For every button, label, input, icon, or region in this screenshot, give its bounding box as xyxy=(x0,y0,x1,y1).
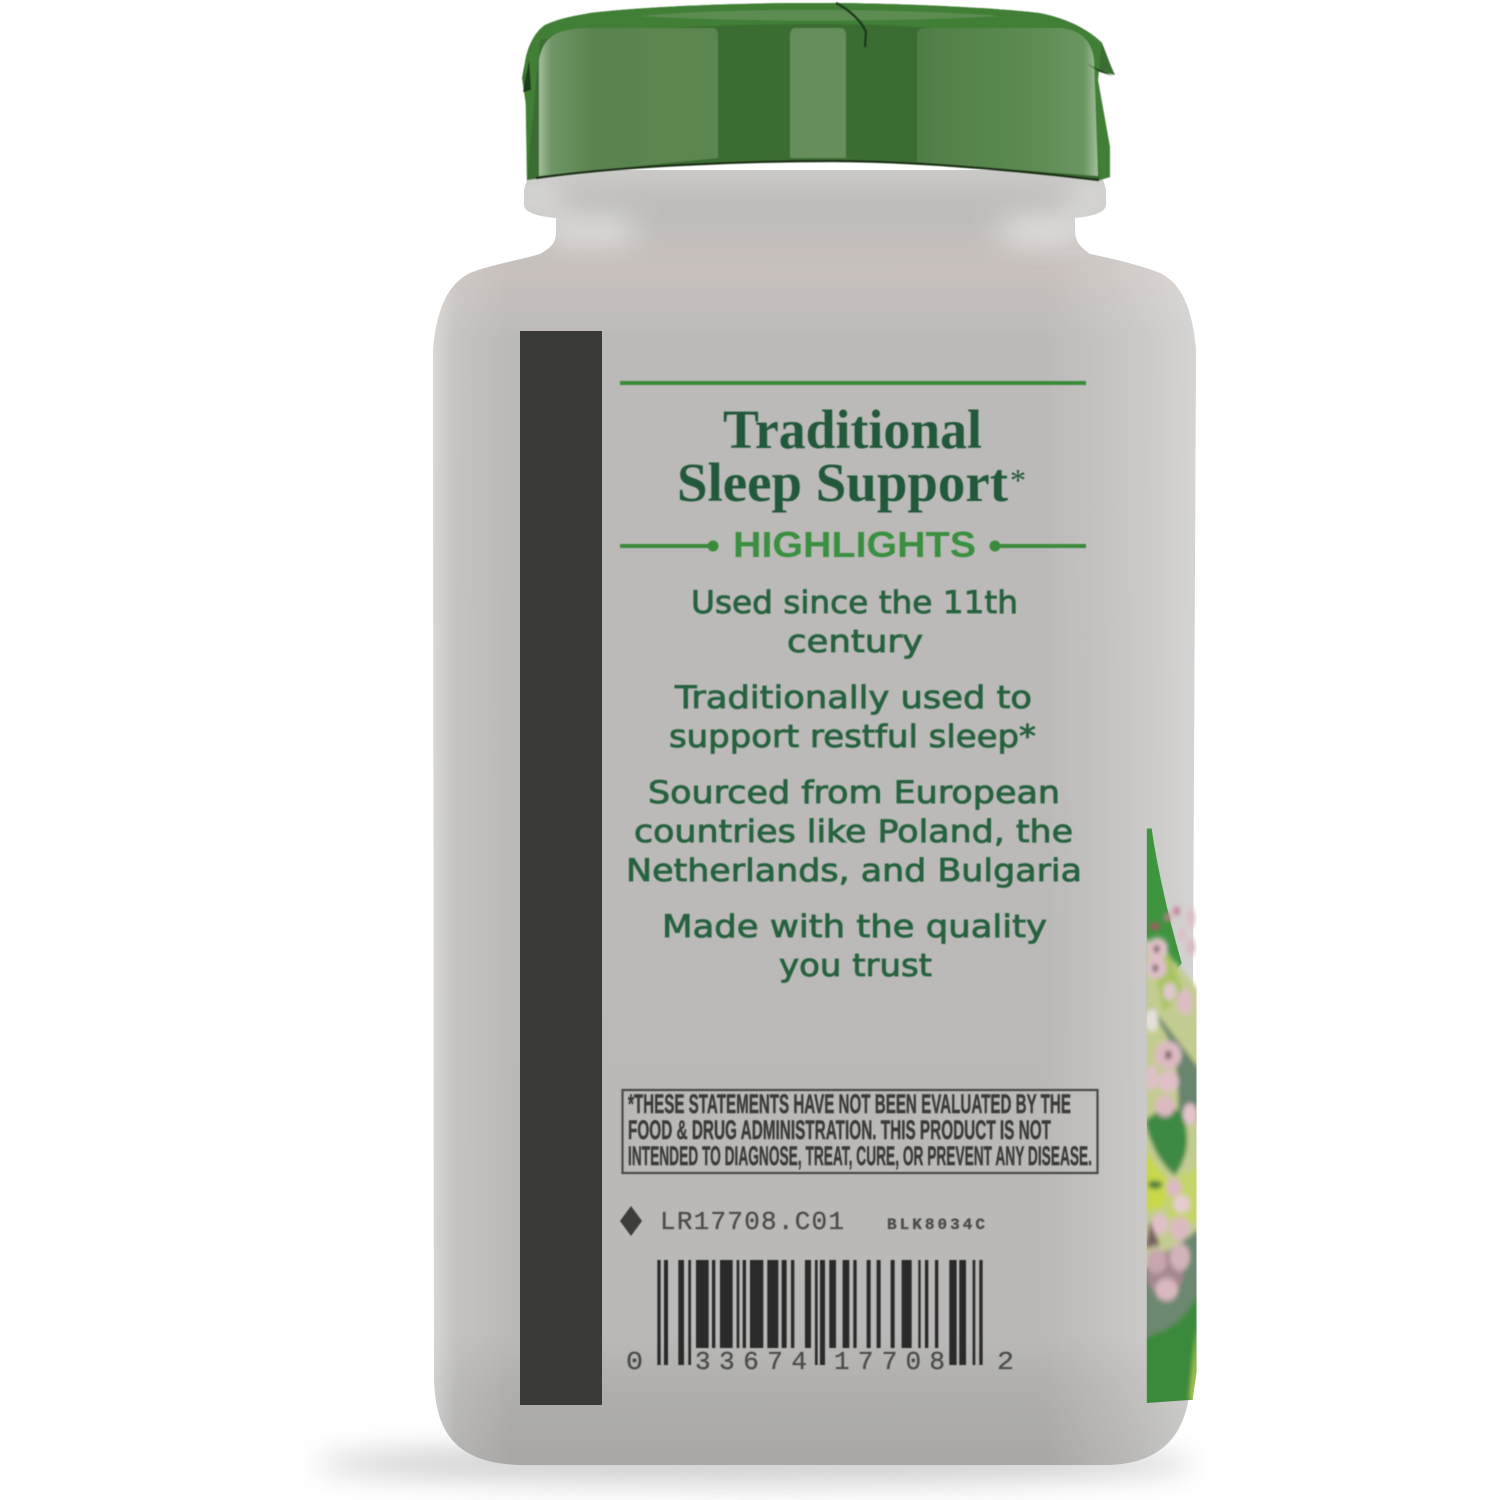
upper sparse blossoms xyxy=(1173,907,1180,915)
dark vertical side stripe xyxy=(520,331,602,1405)
top green rule xyxy=(620,381,1086,385)
heading: Traditional Sleep Support: Traditional xyxy=(723,399,982,460)
highlight: sourcing xyxy=(626,775,1082,889)
highlight: sourcing: countries like Poland, the xyxy=(634,814,1073,850)
highlights divider xyxy=(620,524,1086,565)
flower centres xyxy=(1154,946,1160,952)
highlight: quality: you trust xyxy=(779,948,932,984)
highlight: sourcing: Sourced from European xyxy=(648,775,1060,811)
highlight: used since: century xyxy=(787,624,923,660)
highlight: sourcing: Netherlands, and Bulgaria xyxy=(626,853,1082,889)
label code: LR17708.C01 xyxy=(660,1207,844,1237)
heading: Traditional Sleep Support: Sleep Support xyxy=(677,452,1009,513)
bottom green leaf xyxy=(1146,1294,1196,1403)
barcode digits: 33674 xyxy=(695,1347,807,1377)
heading: Traditional Sleep Support: * xyxy=(1010,462,1026,498)
green leaf wedge xyxy=(1147,829,1182,1012)
FDA disclaimer box: *THESE STATEMENTS HAVE NOT BEEN EVALUATED BY THE xyxy=(628,1089,1071,1119)
highlight: restful sleep: Traditionally used to xyxy=(674,680,1032,716)
green flip-top cap xyxy=(522,3,1115,180)
bottle floor shadow xyxy=(315,1444,1195,1484)
barcode digits xyxy=(626,1347,1014,1377)
heading: Traditional Sleep Support xyxy=(677,399,1026,513)
cap bottom edge xyxy=(536,161,1099,180)
lower grey foliage xyxy=(1143,1228,1200,1339)
cap top highlight xyxy=(640,10,1000,20)
pale foliage mass xyxy=(1146,936,1197,1269)
mauve flower cluster xyxy=(1147,1251,1183,1296)
bottle body with collar and neck xyxy=(420,165,1210,1475)
barcode digits: 17708 xyxy=(834,1347,945,1377)
barcode xyxy=(657,1260,983,1365)
highlight: used since xyxy=(691,585,1018,660)
cap hinge notches xyxy=(523,60,531,92)
plant illustration strip xyxy=(1146,828,1197,1403)
highlight: restful sleep: support restful sleep* xyxy=(669,719,1036,755)
pink flowers xyxy=(1147,937,1168,960)
colour code: BLK8034C xyxy=(887,1216,985,1234)
label text content xyxy=(620,381,1098,1377)
FDA disclaimer box: FOOD & DRUG ADMINISTRATION. THIS PRODUCT IS NOT xyxy=(628,1115,1051,1145)
icon: diamond marker xyxy=(620,1206,642,1236)
barcode digits: 0 xyxy=(626,1347,643,1377)
highlight: used since: Used since the 11th xyxy=(691,585,1018,621)
grey green leaf xyxy=(1156,1015,1197,1123)
cap base shape xyxy=(522,3,1115,180)
barcode digits: 2 xyxy=(997,1347,1014,1377)
highlight: restful sleep xyxy=(669,680,1036,755)
cap light panels xyxy=(539,28,1098,176)
large green leaf xyxy=(1145,1108,1187,1175)
highlight: quality xyxy=(662,909,1047,984)
highlights divider: HIGHLIGHTS xyxy=(733,524,976,565)
FDA disclaimer box xyxy=(622,1089,1098,1173)
cap lid slit xyxy=(836,3,866,47)
highlight: quality: Made with the quality xyxy=(662,909,1047,945)
yellow green foliage xyxy=(1146,1149,1170,1214)
